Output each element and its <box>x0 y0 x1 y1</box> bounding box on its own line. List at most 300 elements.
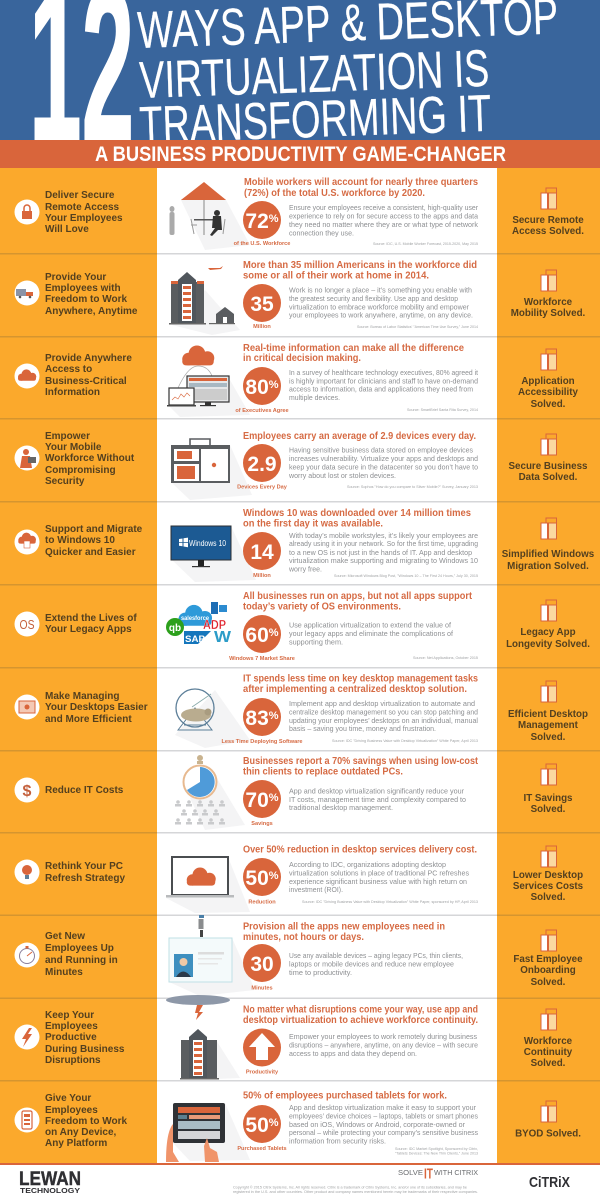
stat circle with up arrow <box>243 1028 281 1066</box>
stat circle 83% <box>243 698 281 736</box>
left heading: Employees <box>45 1105 98 1116</box>
stat circle 50%: % <box>269 1117 279 1129</box>
body text: traditional desktop management. <box>289 803 393 812</box>
source: Source: Bureau of Labor Statistics' "American Time Use Survey," June 2014 <box>357 325 478 329</box>
body text: With today’s mobile workstyles, it’s likely your employees are <box>289 531 478 540</box>
body text <box>289 620 454 646</box>
stat label: of Executives Agree <box>235 408 289 414</box>
headline: Real-time information can make all the difference <box>243 343 464 354</box>
body text: virtualization solutions in place of traditional PC refreshes <box>289 868 469 878</box>
body text: Having sensitive business data stored on employee devices <box>289 446 473 454</box>
stat circle 30: 30 <box>250 953 274 976</box>
body text: updating your employees’ desktops on an individual, manual <box>289 716 478 725</box>
stat circle 50% <box>243 858 281 896</box>
footer <box>0 1163 600 1195</box>
body text: virtualization to embrace workforce mobility and empower <box>289 302 470 311</box>
body text: Ensure your employees receive a consistent, high-quality user <box>289 203 479 212</box>
right caption: Lower Desktop <box>513 870 583 881</box>
left heading <box>45 431 135 487</box>
body text: based on iOS, Windows or Android, corporate-owned or <box>289 1120 466 1129</box>
left heading: Employees Up <box>45 943 114 954</box>
body text <box>289 203 479 238</box>
left icon: stopwatch <box>14 942 40 968</box>
body text: According to IDC, organizations adopting desktop <box>289 860 446 869</box>
stat label: Productivity <box>246 1070 279 1076</box>
body text <box>289 951 463 977</box>
stat circle 35: 35 <box>250 293 274 316</box>
left icon: dollar: $ <box>23 783 32 800</box>
copyright: registered in the U.S. and other countries. Other product and company names mentioned herein may be trademarks of their respective companies. <box>233 1190 478 1194</box>
headline <box>243 756 478 778</box>
headline: Employees carry an average of 2.9 devices every day. <box>243 431 476 442</box>
row 8: IT costs <box>14 755 573 827</box>
left heading: Employees with <box>45 283 121 294</box>
right icon <box>541 1009 556 1030</box>
body text: basis – saving you time, money and frustration. <box>289 724 436 733</box>
body text: disruptions – anywhere, anytime, on any device – with secure <box>289 1040 478 1050</box>
subtitle band: A BUSINESS PRODUCTIVITY GAME-CHANGER <box>95 143 506 166</box>
right caption: Solved. <box>531 804 566 815</box>
tagline <box>398 1166 478 1182</box>
stat circle 30 <box>243 944 281 982</box>
row 3: critical information <box>14 343 578 414</box>
left heading: Employees <box>45 1021 98 1032</box>
headline <box>243 260 477 282</box>
Lewan logo: LEWAN <box>19 1169 81 1190</box>
right caption: Mobility Solved. <box>511 308 586 319</box>
right caption: Efficient Desktop <box>508 709 588 720</box>
right caption: Secure Remote <box>512 215 584 226</box>
headline <box>243 591 472 612</box>
body text: virtualization make supporting and migrating to Windows 10 <box>289 556 478 565</box>
body text: time to productivity. <box>289 968 352 977</box>
body text <box>288 446 478 480</box>
source: Source: IDC "Driving Business Value with Desktop Virtualization" White Paper, April 2013 <box>332 739 478 743</box>
left heading <box>45 190 123 235</box>
headline: today’s variety of OS environments. <box>243 602 401 612</box>
right caption <box>508 709 588 743</box>
left heading <box>45 691 148 725</box>
body text: Empower your employees to work remotely during business <box>289 1032 477 1041</box>
left heading: Your Employees <box>45 213 123 224</box>
left heading: Any Platform <box>45 1138 107 1149</box>
headline: Over 50% reduction in desktop services delivery cost. <box>243 844 477 856</box>
right caption <box>513 870 584 903</box>
body text: IT costs, management time and complexity compared to <box>289 795 466 804</box>
stat circle 83%: % <box>269 710 279 722</box>
headline: 50% of employees purchased tablets for work. <box>243 1090 447 1102</box>
body text: the greatest security and flexibility. Use app and desktop <box>289 294 458 303</box>
right icon <box>541 681 556 702</box>
left icon: cloud upload <box>14 530 40 554</box>
body text: employees’ device choices – laptops, tablets or smart phones <box>289 1112 478 1120</box>
body text: keep your data secure in the datacenter so you don’t have to <box>289 462 478 472</box>
left heading: Provide Anywhere <box>45 353 132 364</box>
body text <box>289 368 478 402</box>
body text: experience significant business value with high return on <box>289 877 467 886</box>
stat circle 14 <box>243 532 281 570</box>
left icon: lightning <box>14 1024 40 1050</box>
row 2: mobility <box>14 260 586 330</box>
body text: Work is no longer a place – it’s something you enable with <box>289 286 472 294</box>
right caption <box>512 215 584 237</box>
stat label: Minutes <box>251 986 273 992</box>
tagline: IT <box>424 1166 433 1182</box>
body text: investment (ROI). <box>289 885 343 894</box>
right caption: Solved. <box>531 892 566 903</box>
illustration: storm and building <box>166 995 230 1080</box>
right caption: Solved. <box>531 1058 566 1069</box>
right icon <box>541 518 556 539</box>
row 10: onboarding <box>14 915 583 992</box>
illustration: windows monitor <box>171 526 231 567</box>
row 6: legacy apps <box>14 591 590 662</box>
illustration: ID badge <box>169 915 232 982</box>
left heading: Anywhere, Anytime <box>45 306 138 317</box>
right caption: Accessibility <box>518 387 578 398</box>
stat circle 50% <box>243 1105 281 1143</box>
right caption: Solved. <box>531 732 566 743</box>
left heading <box>45 861 125 884</box>
source: Source: IDC "Driving Business Value with Desktop Virtualization" White Paper, sponsored by HP, April 2013 <box>302 900 478 904</box>
left heading: Extend the Lives of <box>45 613 137 624</box>
right icon <box>541 846 556 867</box>
body text <box>288 531 478 574</box>
stat label: Purchased Tablets <box>237 1146 287 1152</box>
left heading <box>45 1093 127 1149</box>
right caption <box>518 376 578 410</box>
right caption: Access Solved. <box>512 226 584 237</box>
tagline: WITH CITRIX <box>434 1168 478 1177</box>
left icon: moving truck <box>14 280 40 306</box>
stat label: Million <box>253 324 271 330</box>
headline <box>243 1004 478 1026</box>
left heading: Minutes <box>45 967 83 978</box>
right caption: Secure Business <box>509 461 588 472</box>
left icon: OS: OS <box>20 617 35 632</box>
source <box>395 1147 478 1156</box>
header banner <box>0 0 600 188</box>
stat label: Windows 7 Market Share <box>229 656 295 662</box>
right icon <box>541 764 556 785</box>
right icon <box>541 188 556 209</box>
source: Source: IDC Market Spotlight, Sponsored by Citrix, <box>395 1147 478 1151</box>
left heading: Productive <box>45 1032 97 1043</box>
left icon: light bulb <box>14 860 40 884</box>
left heading: Information <box>45 387 100 398</box>
headline: Provision all the apps new employees need in <box>243 922 445 932</box>
left heading: on Any Device, <box>45 1127 117 1138</box>
stat circle 80%: 80 <box>245 376 269 399</box>
left heading: Reduce IT Costs <box>45 785 124 796</box>
illustration: app logos: salesforce <box>181 615 209 622</box>
body text: Use application virtualization to extend the value of <box>289 620 452 630</box>
right caption: Solved. <box>531 399 566 410</box>
stat circle 60% <box>243 615 281 653</box>
left heading: Will Love <box>45 224 89 235</box>
Lewan logo: TECHNOLOGY <box>20 1188 80 1195</box>
right caption <box>524 1036 573 1069</box>
right caption: Legacy App <box>520 627 576 638</box>
illustration: app logos: qb <box>169 623 181 634</box>
right caption: Migration Solved. <box>507 561 589 572</box>
left icon: dollar <box>14 778 40 802</box>
body text: worry free. <box>288 564 322 574</box>
left heading: Rethink Your PC <box>45 861 123 872</box>
body text <box>289 786 466 812</box>
body text: information from security risks. <box>289 1136 386 1146</box>
left heading: Your Legacy Apps <box>45 624 132 635</box>
right icon <box>541 1101 556 1122</box>
stat circle 60%: % <box>269 627 279 639</box>
right caption <box>506 627 590 650</box>
stat circle 83%: 83 <box>245 707 269 730</box>
right caption: Continuity <box>524 1047 573 1058</box>
headline: No matter what disruptions come your way, use app and <box>243 1004 478 1016</box>
body text: access to information, data and applications they need from <box>289 384 473 394</box>
left heading: and Running in <box>45 955 118 966</box>
headline: All businesses run on apps, but not all apps support <box>243 591 472 602</box>
right icon <box>541 600 556 621</box>
stat circle 50%: % <box>269 870 279 882</box>
row 7: managing desktops <box>14 674 588 745</box>
left icon: cloud <box>14 364 40 388</box>
stat circle 70%: 70 <box>245 789 269 812</box>
headline: (72%) of the total U.S. workforce by 2020. <box>244 188 425 199</box>
right caption: Data Solved. <box>519 472 578 483</box>
headline <box>243 922 445 943</box>
body text: centralize desktop management so you can stop patching and <box>289 708 478 716</box>
right caption <box>513 954 583 988</box>
right caption <box>502 549 595 572</box>
body text <box>289 1032 478 1058</box>
right icon <box>541 349 556 370</box>
stat label: Reduction <box>248 900 276 906</box>
body text: multiple devices. <box>289 393 340 402</box>
headline: minutes, not hours or days. <box>243 932 364 943</box>
left heading <box>45 1010 125 1066</box>
body text: worry about lost or stolen devices. <box>288 471 396 480</box>
left heading: Provide Your <box>45 272 106 283</box>
stat label: of the U.S. Workforce <box>234 241 290 247</box>
row 12: BYOD <box>14 1090 581 1162</box>
source: Source: Net Applications, October 2015 <box>413 656 478 660</box>
left heading: Give Your <box>45 1093 91 1104</box>
right caption: Onboarding <box>520 965 576 976</box>
right caption <box>524 793 573 815</box>
left heading: Remote Access <box>45 202 120 213</box>
body text <box>289 1103 478 1146</box>
left heading: Quicker and Easier <box>45 547 136 558</box>
illustration: laptop with cloud <box>166 857 234 898</box>
stat circle 14: 14 <box>250 541 274 564</box>
left heading: Deliver Secure <box>45 190 115 201</box>
left heading: During Business <box>45 1044 125 1055</box>
left heading <box>45 272 138 317</box>
right icon <box>541 930 556 951</box>
illustration: app logos <box>166 602 232 646</box>
stat circle 50%: 50 <box>245 1114 269 1137</box>
source: Source: Sophos "How do you compare to Silver Mobile?" Survey, January 2013 <box>347 485 478 489</box>
left heading: Your Desktops Easier <box>45 702 148 713</box>
left heading: Get New <box>45 931 85 942</box>
source: Source: Microsoft Windows Blog Post, "Windows 10 – The First 24 Hours," July 30, 2015 <box>334 574 478 578</box>
subtitle band <box>0 140 600 168</box>
right caption: Workforce <box>524 297 573 308</box>
body text: to a new OS is not just in the hands of IT. App and desktop <box>289 548 472 557</box>
body text: increases vulnerability. Virtualize your apps and desktops and <box>289 454 478 463</box>
left icon: OS <box>14 612 40 636</box>
stat circle 80% <box>243 367 281 405</box>
left heading <box>45 613 137 635</box>
left heading: Workforce Without <box>45 453 135 464</box>
right icon <box>541 270 556 291</box>
left icon: lock <box>14 200 40 224</box>
illustration: windows monitor: Windows 10 <box>189 538 226 548</box>
copyright <box>233 1186 478 1194</box>
left icon: banknote <box>14 694 40 720</box>
stat circle 72%: % <box>269 213 279 225</box>
right caption: Workforce <box>524 1036 573 1047</box>
left icon: worker with laptop <box>14 446 40 470</box>
headline: thin clients to replace outdated PCs. <box>243 766 403 778</box>
left heading: Freedom to Work <box>45 294 127 305</box>
left heading: Keep Your <box>45 1010 94 1021</box>
tagline: SOLVE <box>398 1168 423 1177</box>
copyright: Copyright © 2015 Citrix Systems, Inc. All rights reserved. Citrix is a trademark of Citrix Systems, Inc. and/or one of its subsidiaries, and may be <box>233 1186 467 1190</box>
row 5: windows 10 <box>14 508 595 579</box>
row 1: secure remote access <box>14 177 584 247</box>
headline <box>244 177 478 199</box>
stat circle 72% <box>243 201 281 239</box>
left heading: Compromising <box>45 465 116 476</box>
headline: some or all of their work at home in 2014. <box>243 270 429 282</box>
left heading: Make Managing <box>45 691 119 702</box>
headline: desktop virtualization to achieve workforce continuity. <box>243 1015 478 1026</box>
body text: already using it in your network. So for the first time, upgrading <box>289 539 478 548</box>
body text: is highly important for clinicians and staff to have on-demand <box>289 376 478 386</box>
right caption <box>511 297 586 319</box>
source: Source: SmartBrief Santa Rita Survey, 2014 <box>407 408 478 412</box>
right caption: BYOD Solved. <box>515 1128 581 1140</box>
right caption: Longevity Solved. <box>506 639 590 650</box>
source: "Tablets Devices: The New Thin Clients," June 2013 <box>395 1152 478 1156</box>
right caption: Solved. <box>531 977 566 988</box>
body text: App and desktop virtualization significantly reduce your <box>289 786 465 796</box>
headline: Windows 10 was downloaded over 14 million times <box>243 508 471 519</box>
headline <box>243 674 478 695</box>
right caption: Management <box>518 720 579 731</box>
stat circle 2.9 <box>243 444 281 482</box>
headline <box>243 343 464 364</box>
left heading: Freedom to Work <box>45 1116 127 1127</box>
left icon: phone <box>14 1108 40 1132</box>
stat circle 50%: 50 <box>245 867 269 890</box>
stat circle 72%: 72 <box>245 210 269 233</box>
body text: they need no matter where they are or what type of network <box>289 220 478 229</box>
left heading <box>45 524 143 558</box>
right caption: Services Costs <box>513 881 584 892</box>
body text: connection they use. <box>289 228 354 238</box>
body text <box>289 860 469 894</box>
left heading: Support and Migrate <box>45 524 143 535</box>
body text: In a survey of healthcare technology executives, 80% agreed it <box>289 368 478 377</box>
illustration: app logos: SAP <box>185 634 206 645</box>
headline: Mobile workers will account for nearly three quarters <box>244 177 478 188</box>
body text: your employees to work anywhere, anytime, on any device. <box>289 311 473 320</box>
illustration: briefcase <box>171 439 230 483</box>
stat label: Devices Every Day <box>237 484 288 490</box>
illustration: app logos: ADP <box>203 617 226 632</box>
illustration: cloud and devices <box>167 345 229 406</box>
left heading: Your Mobile <box>45 442 102 453</box>
illustration: stopwatch and people <box>175 755 225 824</box>
body text: Use any available devices – aging legacy PCs, thin clients, <box>289 951 463 960</box>
body text: Implement app and desktop virtualization to automate and <box>289 699 475 708</box>
stat label: Less Time Deploying Software <box>221 739 303 745</box>
body text <box>289 699 478 733</box>
left heading: and More Efficient <box>45 714 132 725</box>
stat circle 80%: % <box>269 379 279 391</box>
row 9: PC refresh <box>14 844 584 906</box>
stat label: Savings <box>251 821 273 827</box>
headline: IT spends less time on key desktop management tasks <box>243 674 478 684</box>
left heading <box>45 931 118 978</box>
right caption <box>509 461 588 483</box>
left heading: Security <box>45 476 85 487</box>
body text <box>289 286 473 320</box>
right caption: Application <box>521 376 575 387</box>
illustration: hamster wheel <box>176 689 214 730</box>
Citrix logo: CiTRiX <box>529 1174 570 1191</box>
right caption: Fast Employee <box>513 954 583 965</box>
left heading: Refresh Strategy <box>45 873 125 884</box>
left heading: Business-Critical <box>45 376 127 387</box>
illustration: office and home <box>169 266 235 324</box>
stat circle 70%: % <box>269 792 279 804</box>
left heading: Access to <box>45 364 92 375</box>
headline: after implementing a centralized desktop solution. <box>243 684 467 695</box>
stat circle 70% <box>243 780 281 818</box>
right icon <box>541 434 556 455</box>
left heading <box>45 353 132 398</box>
stat label: Million <box>253 573 271 579</box>
headline: in critical decision making. <box>243 353 361 364</box>
row 11: continuity <box>14 995 573 1080</box>
stat circle 2.9: 2.9 <box>247 453 277 476</box>
left heading: Disruptions <box>45 1055 101 1066</box>
body text: personal – while protecting your company’s sensitive business <box>289 1128 478 1137</box>
stat circle 60%: 60 <box>245 624 269 647</box>
left heading: to Windows 10 <box>45 535 115 546</box>
stat circle 35 <box>243 284 281 322</box>
body text: your legacy apps and eliminate the complications of <box>289 629 454 638</box>
body text: experience to rely on for secure access to the apps and data <box>289 212 479 220</box>
row 4: secure business data <box>14 431 588 490</box>
body text: supporting them. <box>289 638 343 646</box>
headline: More than 35 million Americans in the workforce did <box>243 260 477 271</box>
source: Source: IDC, U.S. Mobile Worker Forecast, 2015-2020, May 2015 <box>373 242 478 246</box>
right caption: IT Savings <box>524 793 573 804</box>
left heading: Empower <box>45 431 90 442</box>
headline <box>243 508 471 530</box>
illustration: tablet in hands <box>166 1103 225 1162</box>
right caption: Simplified Windows <box>502 549 595 560</box>
body text: access to apps and data they depend on. <box>289 1049 417 1058</box>
body text: App and desktop virtualization make it easy to support your <box>289 1103 477 1112</box>
illustration: app logos: W <box>214 629 232 646</box>
headline: Businesses report a 70% savings when using low-cost <box>243 756 478 767</box>
